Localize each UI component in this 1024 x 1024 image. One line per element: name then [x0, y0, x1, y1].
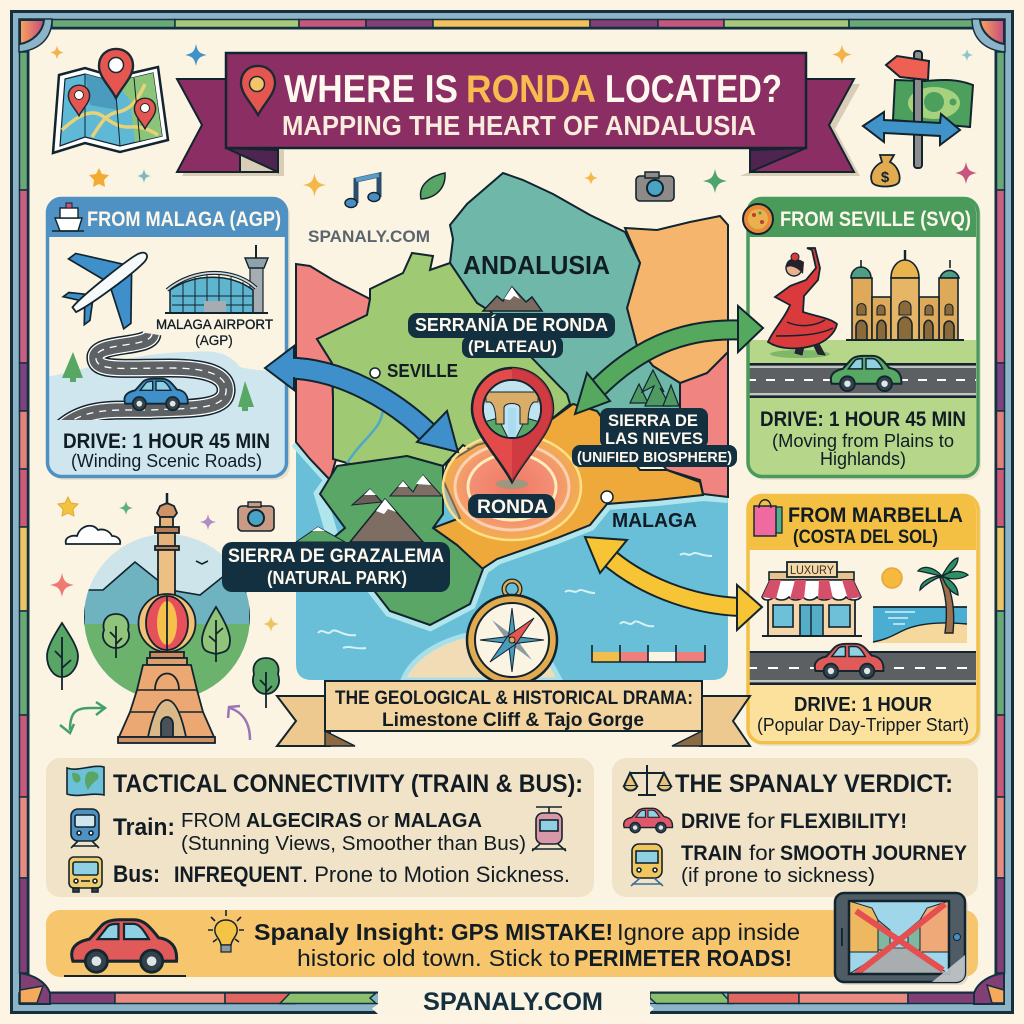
winding road: [62, 334, 226, 428]
label: Sierra de Grazalema: SIERRA DE GRAZALEMA: [228, 546, 444, 567]
icon: blue car: [124, 379, 188, 410]
river: [347, 408, 383, 463]
train details: [181, 810, 526, 855]
train verdict: for: [749, 842, 775, 865]
label: Serrania de Ronda: (PLATEAU): [468, 337, 557, 356]
icon: paella pan: [743, 204, 773, 234]
panel: from Marbella: [747, 495, 981, 746]
region: orange Malaga: [433, 404, 703, 569]
drive verdict: FLEXIBILITY!: [780, 810, 907, 833]
region: teal north: [450, 173, 680, 425]
icon: shopping bag: [754, 500, 782, 536]
bird: [196, 561, 208, 564]
map scale bar: [592, 645, 705, 662]
label: Sierra de Grazalema: (NATURAL PARK): [267, 568, 407, 588]
panel: the Spanaly verdict: [612, 758, 978, 897]
header label: FROM SEVILLE (SVQ): [780, 208, 971, 231]
label: Sierra de las Nieves: LAS NIEVES: [605, 429, 703, 448]
airport label: MALAGA AIRPORT: [156, 317, 273, 332]
note: Highlands): [820, 449, 906, 469]
title banner: [177, 53, 860, 176]
icon: tram: [532, 807, 566, 851]
icon: yellow bus: [69, 857, 102, 892]
train details: or: [367, 810, 389, 832]
label: ANDALUSIA: ANDALUSIA: [463, 250, 610, 280]
train verdict: [681, 842, 967, 887]
arrow: green Seville to Ronda: [575, 306, 763, 414]
icon: green car: [831, 356, 901, 391]
label: Malaga marker: [601, 491, 697, 532]
icon: pine trees: [62, 352, 254, 411]
insight text: Spanaly Insight:: [254, 919, 445, 945]
illustration: Ronda landmark tower: [47, 493, 279, 743]
sea: [296, 442, 728, 680]
train label: Train:: [113, 814, 175, 841]
icon: verdict train: [631, 844, 663, 886]
trees: [47, 607, 279, 708]
icon: title pin: [241, 66, 275, 115]
doodle stars: [50, 497, 279, 632]
label: Sierra de las Nieves: SIERRA DE: [608, 411, 698, 430]
icon: tablet with crossed-out street: [835, 893, 968, 985]
train verdict: TRAIN: [681, 842, 742, 865]
icon: flamenco dancer: [768, 248, 837, 358]
landscape disc: [84, 534, 250, 704]
train verdict: SMOOTH JOURNEY: [780, 842, 967, 865]
label: SPANALY.COM watermark: SPANALY.COM: [308, 227, 430, 246]
icon: camera: [238, 502, 274, 531]
icon: pine trees: [630, 370, 679, 406]
train details: MALAGA: [394, 810, 482, 832]
label: Seville marker: SEVILLE: [387, 361, 458, 381]
panel: from Seville: [743, 198, 981, 480]
label: Serrania de Ronda: SERRANÍA DE RONDA: [415, 314, 608, 335]
header label: FROM MALAGA (AGP): [87, 208, 281, 231]
drive time: DRIVE: 1 HOUR 45 MIN: [63, 430, 270, 453]
icon: light bulb: [208, 910, 244, 952]
bus label: Bus:: [113, 861, 160, 888]
label: Serrania de Ronda: [408, 313, 615, 358]
map of Andalusia: [296, 173, 728, 685]
region: east salmon: [640, 352, 728, 497]
train verdict: (if prone to sickness): [681, 865, 875, 887]
insight text: Ignore app inside: [617, 919, 800, 945]
icon: airplane: [47, 220, 174, 346]
subtitle: MAPPING THE HEART OF ANDALUSIA: [282, 110, 756, 141]
banner: geological and historical drama: [277, 681, 750, 746]
drive verdict: DRIVE: [681, 810, 741, 833]
sand at bottom: [403, 625, 560, 680]
arrow: yellow Marbella to Ronda: [585, 537, 762, 630]
label: RONDA pill: RONDA: [477, 497, 548, 518]
title text: WHERE IS: [284, 68, 458, 111]
ribbon tails: [177, 79, 860, 176]
icon: Serrania mountains: [483, 287, 542, 311]
icon: Grazalema mountains: [296, 475, 442, 542]
note: (Moving from Plains to: [772, 431, 954, 451]
icon: Puente Nuevo bridge: [484, 380, 540, 440]
icon: verdict car: [624, 808, 672, 833]
footer: SPANALY.COM: SPANALY.COM: [423, 988, 603, 1016]
bus details: [174, 862, 570, 887]
tower base: [118, 652, 215, 743]
Ronda pin marker: [472, 368, 553, 482]
label: Sierra de las Nieves: [572, 408, 737, 467]
panel: tactical connectivity: [46, 758, 594, 897]
icon: signpost with banknote and money bag: [863, 51, 973, 186]
panel: from Malaga: [47, 198, 290, 480]
waves: [318, 553, 712, 648]
note: (Winding Scenic Roads): [71, 451, 262, 471]
panel: Spanaly insight: [46, 893, 978, 985]
icon: signpost with banknote and money bag: $: [881, 169, 890, 186]
tower spire and column: [155, 493, 179, 596]
icon: scales: [624, 765, 671, 795]
doodle arrows: [60, 702, 250, 740]
icon: beach with palm and sun: [873, 558, 968, 643]
insight text: PERIMETER ROADS!: [574, 945, 792, 971]
train details: FROM: [181, 810, 241, 832]
insight text: GPS MISTAKE!: [451, 919, 613, 945]
header label: (COSTA DEL SOL): [793, 527, 938, 548]
arrow: blue Malaga to Ronda: [265, 346, 458, 452]
train details: ALGECIRAS: [246, 810, 362, 832]
airport label: [156, 317, 273, 348]
icon: red car: [64, 920, 186, 976]
cloud: [66, 526, 120, 544]
sparkle stars around the header: [50, 44, 977, 196]
icon: folded map with pins: [53, 49, 168, 153]
region: east orange: [625, 216, 728, 383]
insight text: historic old town. Stick to: [297, 945, 570, 971]
coast glow: [296, 442, 728, 625]
region: green Cadiz: [320, 456, 483, 625]
banner: geological and historical drama: THE GEOLOGICAL & HISTORICAL DRAMA:: [335, 688, 693, 709]
region: west salmon: [296, 264, 370, 480]
icon: red car: [815, 644, 883, 678]
icon: world map: [67, 766, 104, 795]
label: Sierra de Grazalema: [222, 542, 450, 592]
drive time: DRIVE: 1 HOUR: [794, 693, 932, 716]
map doodles: music note, leaf, camera: [345, 172, 674, 208]
Ronda glow rings: [443, 434, 581, 540]
label: Sierra de las Nieves: (UNIFIED BIOSPHERE): [577, 449, 732, 466]
shop sign text: LUXURY: [790, 565, 834, 577]
heading: THE SPANALY VERDICT:: [675, 770, 953, 798]
compass: [467, 581, 557, 685]
bus details: . Prone to Motion Sickness.: [302, 862, 570, 887]
tower sphere: [138, 594, 196, 652]
title banner: LOCATED?: [605, 68, 782, 111]
drive verdict: for: [747, 810, 775, 833]
title banner: RONDA: [466, 68, 596, 111]
icon: airport terminal: [165, 245, 268, 313]
icon: cruise ship: [52, 203, 84, 231]
icon: blue train: [71, 809, 99, 848]
header label: [788, 504, 963, 548]
bus details: INFREQUENT: [174, 862, 303, 887]
insight text: [254, 919, 800, 971]
note: (Popular Day-Tripper Start): [757, 715, 969, 735]
header label: FROM MARBELLA: [788, 504, 963, 527]
note: [772, 431, 954, 469]
train details: (Stunning Views, Smoother than Bus): [181, 833, 526, 855]
icon: luxury shop: [762, 562, 862, 636]
drive verdict: [681, 810, 907, 833]
drive time: DRIVE: 1 HOUR 45 MIN: [760, 408, 966, 431]
banner: geological and historical drama: Limestone Cliff & Tajo Gorge: [382, 710, 644, 731]
region: light green Seville: [317, 253, 570, 466]
label: Malaga marker: MALAGA: [612, 510, 697, 532]
airport label: (AGP): [195, 333, 233, 348]
heading: TACTICAL CONNECTIVITY (TRAIN & BUS):: [113, 770, 583, 798]
icon: cathedral: [846, 250, 964, 340]
